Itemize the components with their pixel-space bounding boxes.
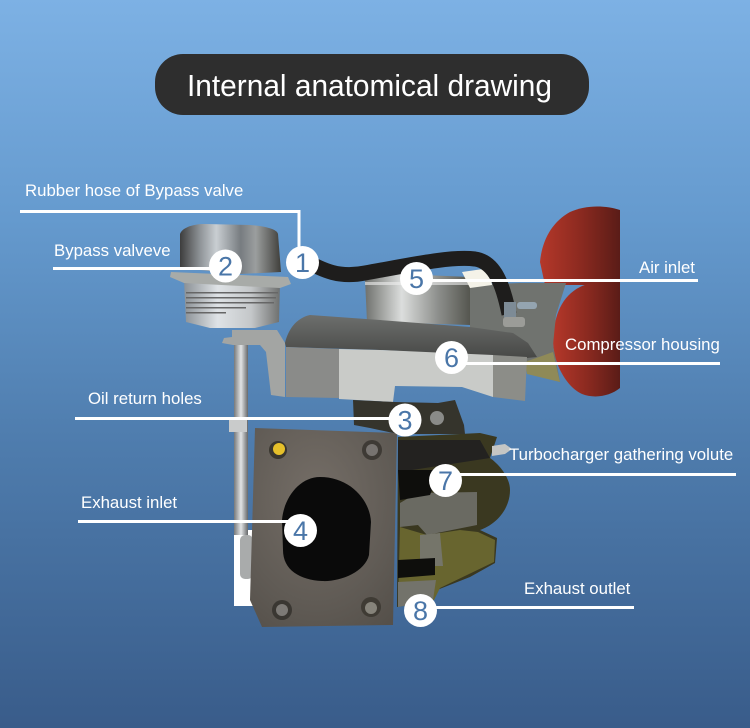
actuator flange [170,272,291,288]
callout 5: air inlet: 5 [409,264,424,294]
callout 8: exhaust outlet: Exhaust outlet [524,579,631,598]
callout 1: rubber hose of bypass valve [20,181,319,279]
actuator rod [229,345,253,606]
callout 4: exhaust inlet [78,493,317,547]
oil return bolt [430,411,444,425]
actuator top can [180,224,281,274]
exhaust inlet opening [282,477,371,581]
title: Internal anatomical drawing [187,68,552,103]
callout 1: rubber hose of bypass valve: Rubber hose of Bypass valve [25,181,243,200]
callout 2: bypass valve: 2 [218,252,233,282]
callout 7: turbocharger gathering volute: Turbocharger gathering volute [509,445,733,464]
compressor silver body [286,347,527,402]
callout 3: oil return holes: 3 [397,406,413,436]
exhaust inlet flange plate [250,428,397,627]
callout 4: exhaust inlet: Exhaust inlet [81,493,177,512]
callout 5: air inlet: Air inlet [639,258,695,277]
oil return block [353,400,465,434]
callout 5: air inlet [400,258,698,295]
wastegate actuator [170,224,291,328]
callout 2: bypass valve [53,241,242,282]
olive shadow under housing [525,352,560,382]
compressor dome [285,315,537,358]
actuator label print [186,292,278,314]
callout 6: compressor housing: 6 [444,343,459,373]
rubber hose [296,256,509,314]
callout 6: compressor housing [435,335,720,374]
actuator lower can [184,280,280,328]
hose clamp [503,302,537,327]
callout 3: oil return holes: Oil return holes [88,389,202,408]
callout 6: compressor housing: Compressor housing [565,335,720,354]
callout 2: bypass valve: Bypass valveve [54,241,171,260]
turbine volute [397,433,510,607]
turbocharger illustration [170,206,620,627]
callout 7: turbocharger gathering volute: 7 [438,466,453,496]
air inlet neck [365,268,492,325]
callout 1: rubber hose of bypass valve: 1 [295,248,310,278]
compressor rear housing [468,283,566,382]
mounting bracket [222,330,285,397]
callout 8: exhaust outlet: 8 [413,596,428,626]
volute bolt fitting [492,444,512,456]
callout 8: exhaust outlet [404,579,634,627]
callout 3: oil return holes [75,389,422,436]
title [155,54,589,115]
callout 4: exhaust inlet: 4 [293,516,308,546]
callout 7: turbocharger gathering volute [429,445,736,497]
red air inlet cap [540,206,620,396]
